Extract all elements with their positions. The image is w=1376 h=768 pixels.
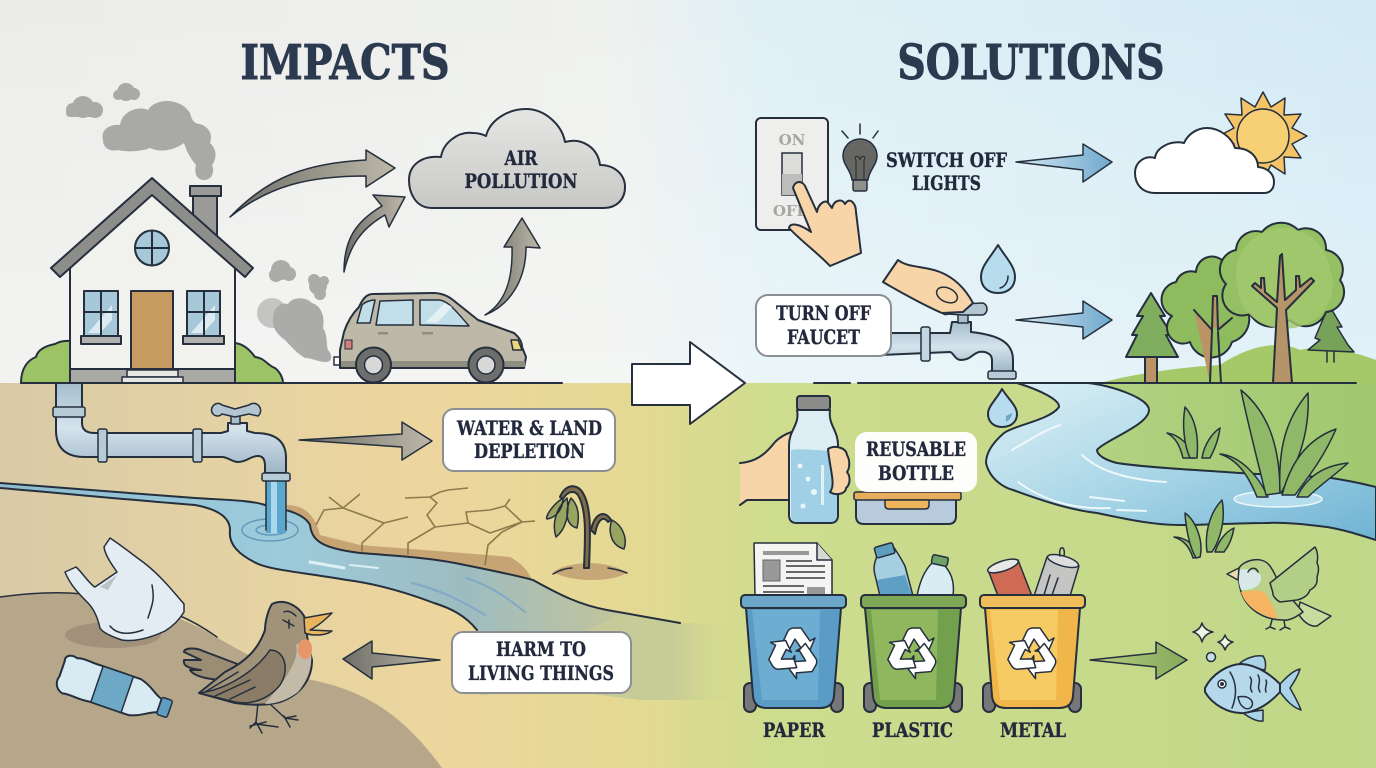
bank grass (1174, 500, 1234, 558)
label: reusable bottle (855, 432, 977, 492)
bin labels: METAL (1000, 719, 1066, 742)
arrow: recycling to wildlife (1090, 642, 1187, 679)
label: turn off faucet: FAUCET (787, 326, 860, 349)
walls (70, 190, 235, 369)
horizon line right (814, 382, 1356, 384)
faucet: running (53, 383, 290, 481)
pool ripples (242, 519, 298, 541)
text: switch off lights: SWITCH OFF (886, 149, 1007, 172)
roof (51, 178, 253, 277)
arrow: impacts to solutions (632, 342, 745, 424)
water drop above faucet (981, 245, 1015, 293)
door (131, 291, 173, 369)
lunch box (854, 492, 961, 524)
bin labels (763, 719, 1066, 742)
water stream (266, 481, 286, 533)
arrow: exhaust to air pollution (344, 195, 405, 272)
label: harm to living things: HARM TO (496, 638, 586, 661)
background: green bank right of river (1070, 383, 1376, 520)
light bulb (842, 124, 878, 191)
text: switch off lights: LIGHTS (912, 172, 981, 195)
hand on faucet (883, 260, 973, 313)
cloud: air pollution: POLLUTION (464, 170, 578, 193)
arrow: lights to clean sky (1016, 144, 1112, 182)
panel: solutions below ground (740, 383, 1376, 742)
fading river (477, 610, 740, 700)
horizon line left (21, 382, 562, 384)
label: reusable bottle: REUSABLE (866, 438, 966, 461)
river body (0, 484, 620, 639)
arrow: house to air pollution (230, 150, 395, 217)
cans (986, 548, 1080, 596)
plastic bottle (54, 653, 176, 728)
river ripples (1012, 425, 1166, 511)
polluted mound (0, 593, 442, 768)
pine tree (1126, 293, 1178, 383)
arrow: faucet to trees (1016, 301, 1112, 339)
cloud: air pollution: AIR (504, 147, 538, 170)
right window (183, 291, 224, 344)
hand on switch (789, 182, 861, 266)
reusable bottle (789, 396, 838, 523)
back pine (1308, 305, 1354, 362)
panel: impacts below ground (0, 383, 740, 768)
mound edge (0, 593, 217, 637)
arrow: harm to bird (343, 641, 440, 679)
recycling bin: paper (741, 595, 846, 712)
green hill (1100, 345, 1376, 383)
left window (81, 291, 121, 344)
clean river (986, 383, 1376, 540)
arrow: car to air pollution (485, 218, 540, 315)
label: water and land depletion (443, 409, 615, 471)
chimney (190, 186, 221, 240)
recycling bin: metal (980, 595, 1085, 712)
hand holding bottle (740, 430, 804, 505)
title: impacts: IMPACTS (240, 35, 450, 91)
river highlights (310, 562, 525, 615)
middle tree (1162, 257, 1249, 383)
newspaper (754, 543, 832, 596)
panel: impacts above ground (21, 83, 625, 383)
sick bird (184, 602, 332, 733)
faucet: turned off (880, 303, 1016, 379)
grass (1167, 407, 1220, 458)
water drop below faucet (988, 389, 1017, 427)
wilted plant (547, 486, 627, 580)
label: reusable bottle: BOTTLE (878, 462, 954, 485)
cracked earth (316, 488, 535, 565)
plastic bag (65, 538, 184, 648)
steps (122, 370, 183, 383)
label: harm to living things: LIVING THINGS (468, 662, 614, 685)
sparkles (1193, 623, 1233, 662)
large tree (1220, 223, 1344, 383)
sun (1219, 92, 1307, 180)
car exhaust smoke (257, 260, 331, 362)
smoke from chimney (66, 83, 216, 180)
label: water and land depletion: WATER & LAND (456, 417, 602, 440)
label: water and land depletion: DEPLETION (474, 440, 585, 463)
bin labels: PAPER (763, 719, 826, 742)
car (334, 293, 526, 382)
cloud: air pollution (409, 109, 625, 208)
white cloud (1135, 128, 1274, 193)
fish (1205, 656, 1301, 721)
arrow: to water and land depletion (299, 422, 432, 460)
bin labels: PLASTIC (872, 719, 953, 742)
title: solutions: SOLUTIONS (898, 35, 1164, 91)
finger on faucet (934, 284, 960, 306)
label: harm to living things (452, 632, 631, 693)
foundation (70, 369, 235, 383)
round window (135, 230, 169, 266)
light switch (756, 118, 828, 230)
label: turn off faucet (756, 295, 1016, 379)
background: ground (0, 383, 1376, 768)
background: sky (0, 0, 1376, 384)
label: turn off faucet: TURN OFF (776, 302, 871, 325)
recycling bin: plastic (861, 595, 966, 712)
bushes (21, 341, 283, 383)
happy bird (1227, 547, 1331, 630)
light switch: OFF (773, 202, 808, 220)
river edges (0, 483, 680, 630)
plastic bottles (874, 542, 953, 596)
house (21, 178, 283, 383)
panel: solutions above ground (756, 92, 1376, 383)
text: switch off lights (886, 149, 1007, 195)
light switch: ON (779, 131, 806, 149)
fingers on bottle (828, 447, 850, 494)
dry bank (285, 505, 533, 582)
water plant (1220, 390, 1348, 507)
